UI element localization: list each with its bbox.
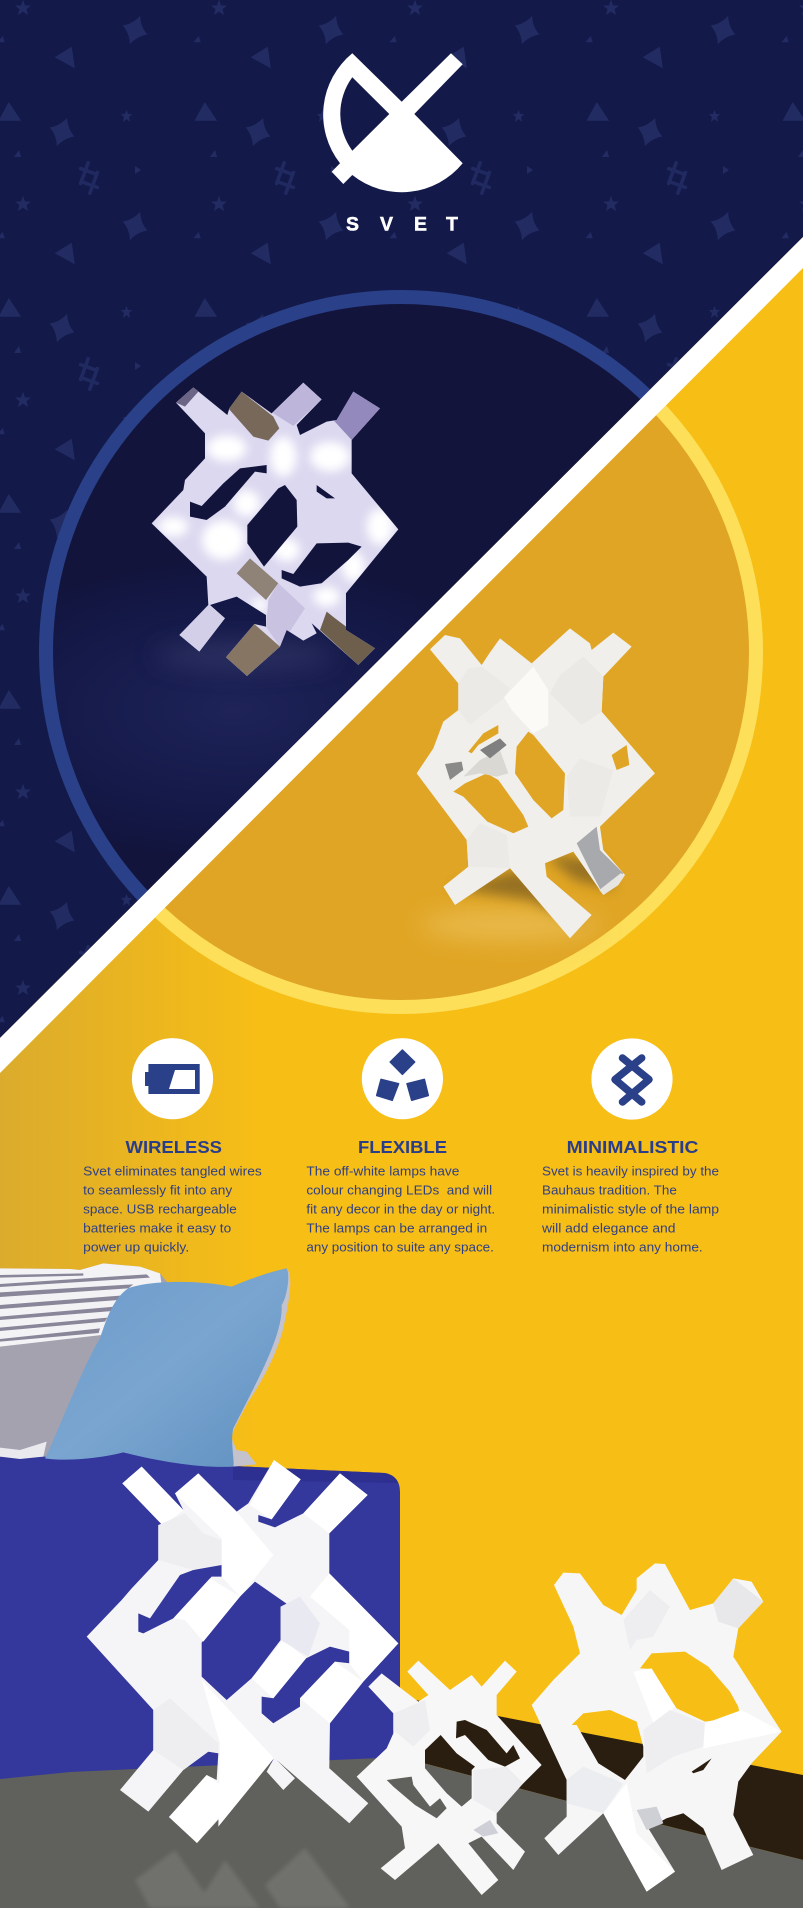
text: flexible xyxy=(306,1164,495,1255)
day half of the circle xyxy=(155,406,763,1014)
photo: room scene xyxy=(0,1263,803,1908)
yellow ring and amber disc xyxy=(155,406,763,1014)
cushion piping xyxy=(217,1268,290,1467)
glowing lamp xyxy=(152,383,398,676)
lamp facets xyxy=(445,657,625,895)
text: minimalistic: Svet is heavily inspired by the xyxy=(542,1164,719,1179)
heading: wireless: WIRELESS xyxy=(126,1137,222,1157)
text: minimalistic: minimalistic style of the lamp xyxy=(542,1202,719,1217)
small lamp xyxy=(357,1661,542,1895)
logo wordmark: SVET xyxy=(346,214,458,236)
striped cushion xyxy=(0,1263,168,1459)
text: minimalistic: Bauhaus tradition. The xyxy=(542,1183,677,1198)
heading: minimalistic: MINIMALISTIC xyxy=(567,1137,699,1157)
text: wireless: to seamlessly fit into any xyxy=(83,1183,233,1198)
floor glow xyxy=(155,641,335,669)
text: flexible: The lamps can be arranged in xyxy=(306,1221,487,1236)
text: wireless: space. USB rechargeable xyxy=(83,1202,237,1217)
text: wireless: Svet eliminates tangled wires xyxy=(83,1164,262,1179)
blue ring and dark disc xyxy=(39,290,650,900)
text: minimalistic: will add elegance and xyxy=(541,1221,676,1236)
logo mark xyxy=(323,53,463,192)
white lamp xyxy=(417,628,655,938)
lit glow highlights xyxy=(158,383,393,676)
floor reflections xyxy=(135,1848,350,1908)
feature: minimalistic xyxy=(541,1038,719,1255)
night half of the circle xyxy=(39,290,650,900)
heading: flexible: FLEXIBLE xyxy=(358,1137,447,1157)
floor xyxy=(0,1745,803,1908)
blue cushion xyxy=(45,1268,288,1467)
text: minimalistic xyxy=(541,1164,719,1255)
text: wireless: power up quickly. xyxy=(83,1240,189,1255)
medium lamp xyxy=(532,1563,782,1892)
text: flexible: colour changing LEDs and will xyxy=(306,1183,492,1198)
feature: wireless xyxy=(83,1038,262,1255)
floor highlight xyxy=(420,909,600,941)
background: navy patterned upper panel xyxy=(0,0,803,1040)
diagonal white band xyxy=(0,237,803,1073)
icon: lamp glyph xyxy=(591,1038,673,1120)
lamp facets xyxy=(393,1700,523,1837)
text: flexible: any position to suite any space. xyxy=(306,1240,494,1255)
feature: flexible xyxy=(306,1038,495,1255)
icon: three modules xyxy=(362,1038,443,1119)
cushions xyxy=(0,1263,290,1467)
icon: battery xyxy=(132,1038,213,1119)
text: wireless: batteries make it easy to xyxy=(83,1221,231,1236)
text: minimalistic: modernism into any home. xyxy=(542,1240,703,1255)
text: flexible: The off-white lamps have xyxy=(306,1164,459,1179)
lamp facets xyxy=(122,1460,398,1843)
large lamp xyxy=(87,1460,398,1843)
lamp shadow xyxy=(467,852,618,918)
baseboard xyxy=(400,1697,803,1860)
text: wireless xyxy=(83,1164,262,1255)
text: flexible: fit any decor in the day or night. xyxy=(306,1202,495,1217)
tan shaded tips xyxy=(176,383,380,676)
gray cylinder xyxy=(577,827,623,895)
sofa xyxy=(0,1448,400,1779)
lamp facets xyxy=(567,1578,782,1892)
left shading of yellow panel xyxy=(0,813,260,1440)
